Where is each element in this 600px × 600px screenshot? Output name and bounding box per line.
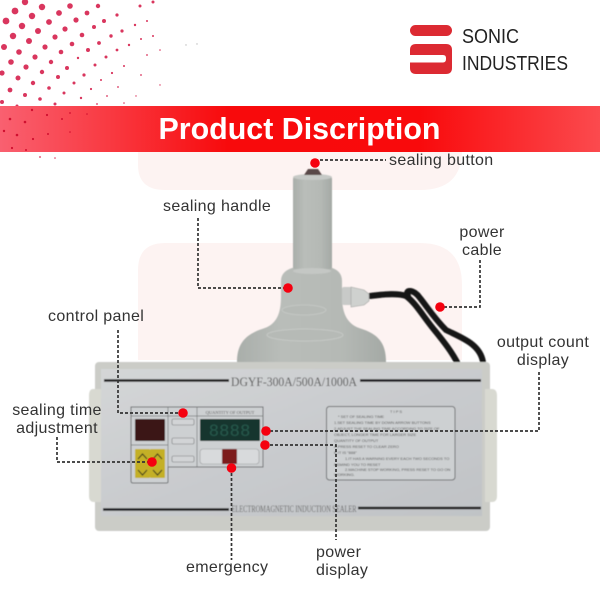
model line — [104, 379, 481, 382]
tips panel: A.PRESS RESET TO CLEAR ZERO — [334, 444, 399, 449]
tips panel: QUANTITY OF OUTPUT — [334, 438, 379, 443]
callout: emergency — [186, 463, 268, 576]
sealing head body — [237, 174, 386, 362]
callout: sealing button — [310, 152, 494, 169]
bottom line — [103, 508, 481, 510]
bottom label: ELECTROMAGNETIC INDUCTION SEALER — [232, 504, 356, 514]
callout: power display — [260, 440, 368, 579]
callout: power cable — [435, 224, 505, 312]
callout: control panel: control panel — [48, 308, 144, 325]
callout: control panel — [48, 308, 188, 418]
header label: QUANTITY OF OUTPUT — [206, 410, 255, 415]
callout: sealing time adjustment — [12, 402, 157, 467]
callout: sealing handle — [163, 198, 293, 293]
halftone dot pattern — [0, 0, 198, 159]
callout: output count display: output count — [497, 334, 589, 351]
callout: sealing time adjustment: adjustment — [16, 420, 98, 437]
tips panel: 2.MACHINE STOP WORKING, PRESS RESET TO GO ON — [345, 467, 451, 472]
tips panel: 1.SET SEALING TIME BY DOWN ARROW BUTTONS — [334, 420, 431, 425]
tips panel: B.IT IS "888" — [334, 450, 357, 455]
tips panel: 1.IT HAS A WARNING EVERY EACH TWO SECONDS TO — [345, 456, 449, 461]
callout: output count display — [261, 334, 589, 436]
tips panel — [326, 406, 455, 480]
tips panel: REMIND YOU TO RESET — [334, 462, 381, 467]
control housing — [89, 362, 497, 531]
callout: sealing time adjustment: sealing time — [12, 402, 102, 419]
tips panel: WORKING. — [334, 472, 355, 477]
callout: power cable: power — [459, 224, 505, 241]
tips panel: 2.ADJUST THE SEALING TIME ACCORDING TO SIZE OF — [334, 426, 440, 431]
logo mark — [410, 25, 452, 74]
control block — [131, 407, 263, 483]
sealing button cap — [304, 169, 322, 175]
callout: sealing button: sealing button — [389, 152, 494, 169]
device: induction sealer photo — [89, 169, 497, 531]
power cable — [370, 291, 483, 364]
callout: output count display: display — [517, 352, 569, 369]
keypad — [135, 449, 165, 478]
model heading: DGYF-300A/500A/1000A — [231, 374, 358, 389]
callout: sealing handle: sealing handle — [163, 198, 271, 215]
callout: power display: display — [316, 562, 368, 579]
time display — [135, 419, 165, 441]
callout: power cable: cable — [462, 242, 502, 259]
logo text: INDUSTRIES — [462, 53, 568, 75]
tips panel: OBJECT, LONGER TIME FOR LARGER SIZE — [334, 432, 416, 437]
emergency switch — [200, 449, 259, 464]
tips panel: * SET OF SEALING TIME — [338, 414, 384, 419]
tips panel: T I P S — [390, 409, 402, 414]
output display: 8888 — [209, 421, 251, 440]
background decorative pale shapes — [138, 130, 462, 360]
title banner — [0, 106, 600, 152]
logo: Sonic Industries — [410, 25, 568, 75]
callout: power display: power — [316, 544, 362, 561]
logo text — [462, 26, 568, 75]
callout: emergency: emergency — [186, 559, 268, 576]
logo text: SONIC — [462, 26, 519, 48]
cable gland — [342, 287, 369, 307]
small buttons — [172, 419, 194, 462]
heading: Product Discription — [159, 112, 440, 146]
side handles — [89, 389, 101, 502]
banner dots — [3, 109, 88, 151]
